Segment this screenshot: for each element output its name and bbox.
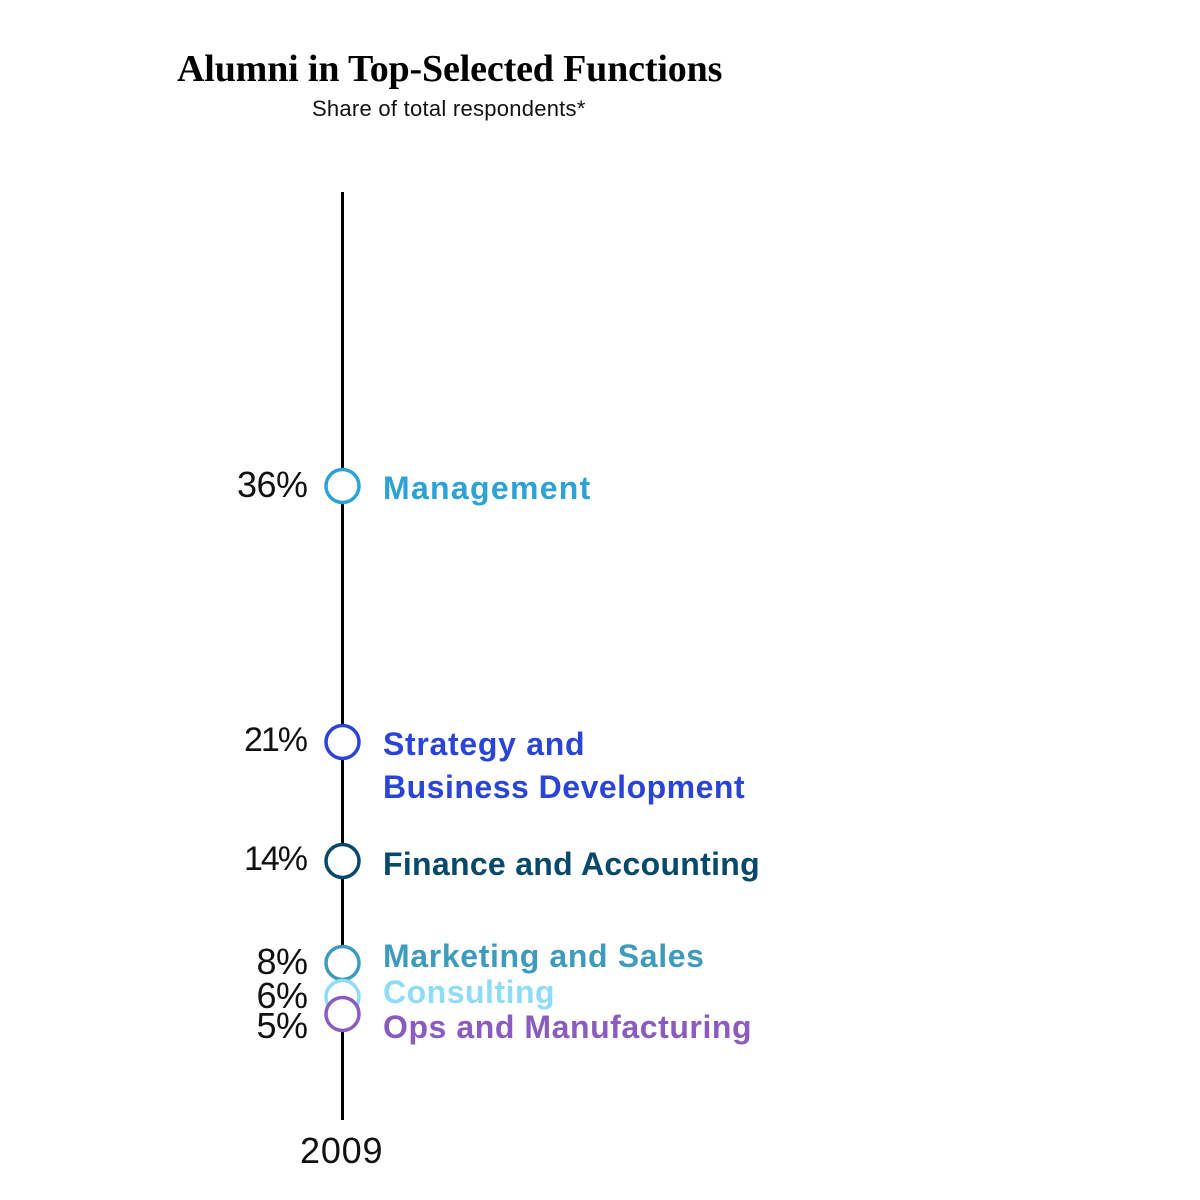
label Ops: Ops and Manufacturing [383, 1009, 752, 1045]
year label: 2009 [300, 1130, 383, 1171]
value 8%: 8% [256, 941, 308, 982]
label Strategy: Business Development [383, 769, 745, 805]
label Consulting: Consulting [383, 974, 555, 1010]
value 14%: 14% [244, 840, 306, 878]
marker: Strategy [326, 726, 359, 758]
label Finance: Finance and Accounting [383, 846, 760, 882]
label Marketing: Marketing and Sales [383, 938, 705, 974]
marker: Ops [326, 998, 359, 1030]
value 36%: 36% [237, 464, 308, 505]
label Management: Management [383, 470, 592, 506]
timeline axis [341, 192, 344, 1120]
subtitle: Share of total respondents* [312, 96, 586, 121]
value 21%: 21% [244, 721, 306, 759]
marker: Marketing [326, 946, 359, 980]
label Strategy: Strategy and [383, 726, 585, 762]
marker: Management [326, 470, 359, 502]
value 5%: 5% [256, 1005, 308, 1046]
label Strategy [383, 726, 745, 805]
title: Alumni in Top-Selected Functions [177, 48, 722, 90]
marker: Finance [326, 844, 359, 878]
marker: Consulting [326, 980, 359, 1014]
value 6%: 6% [256, 975, 308, 1016]
